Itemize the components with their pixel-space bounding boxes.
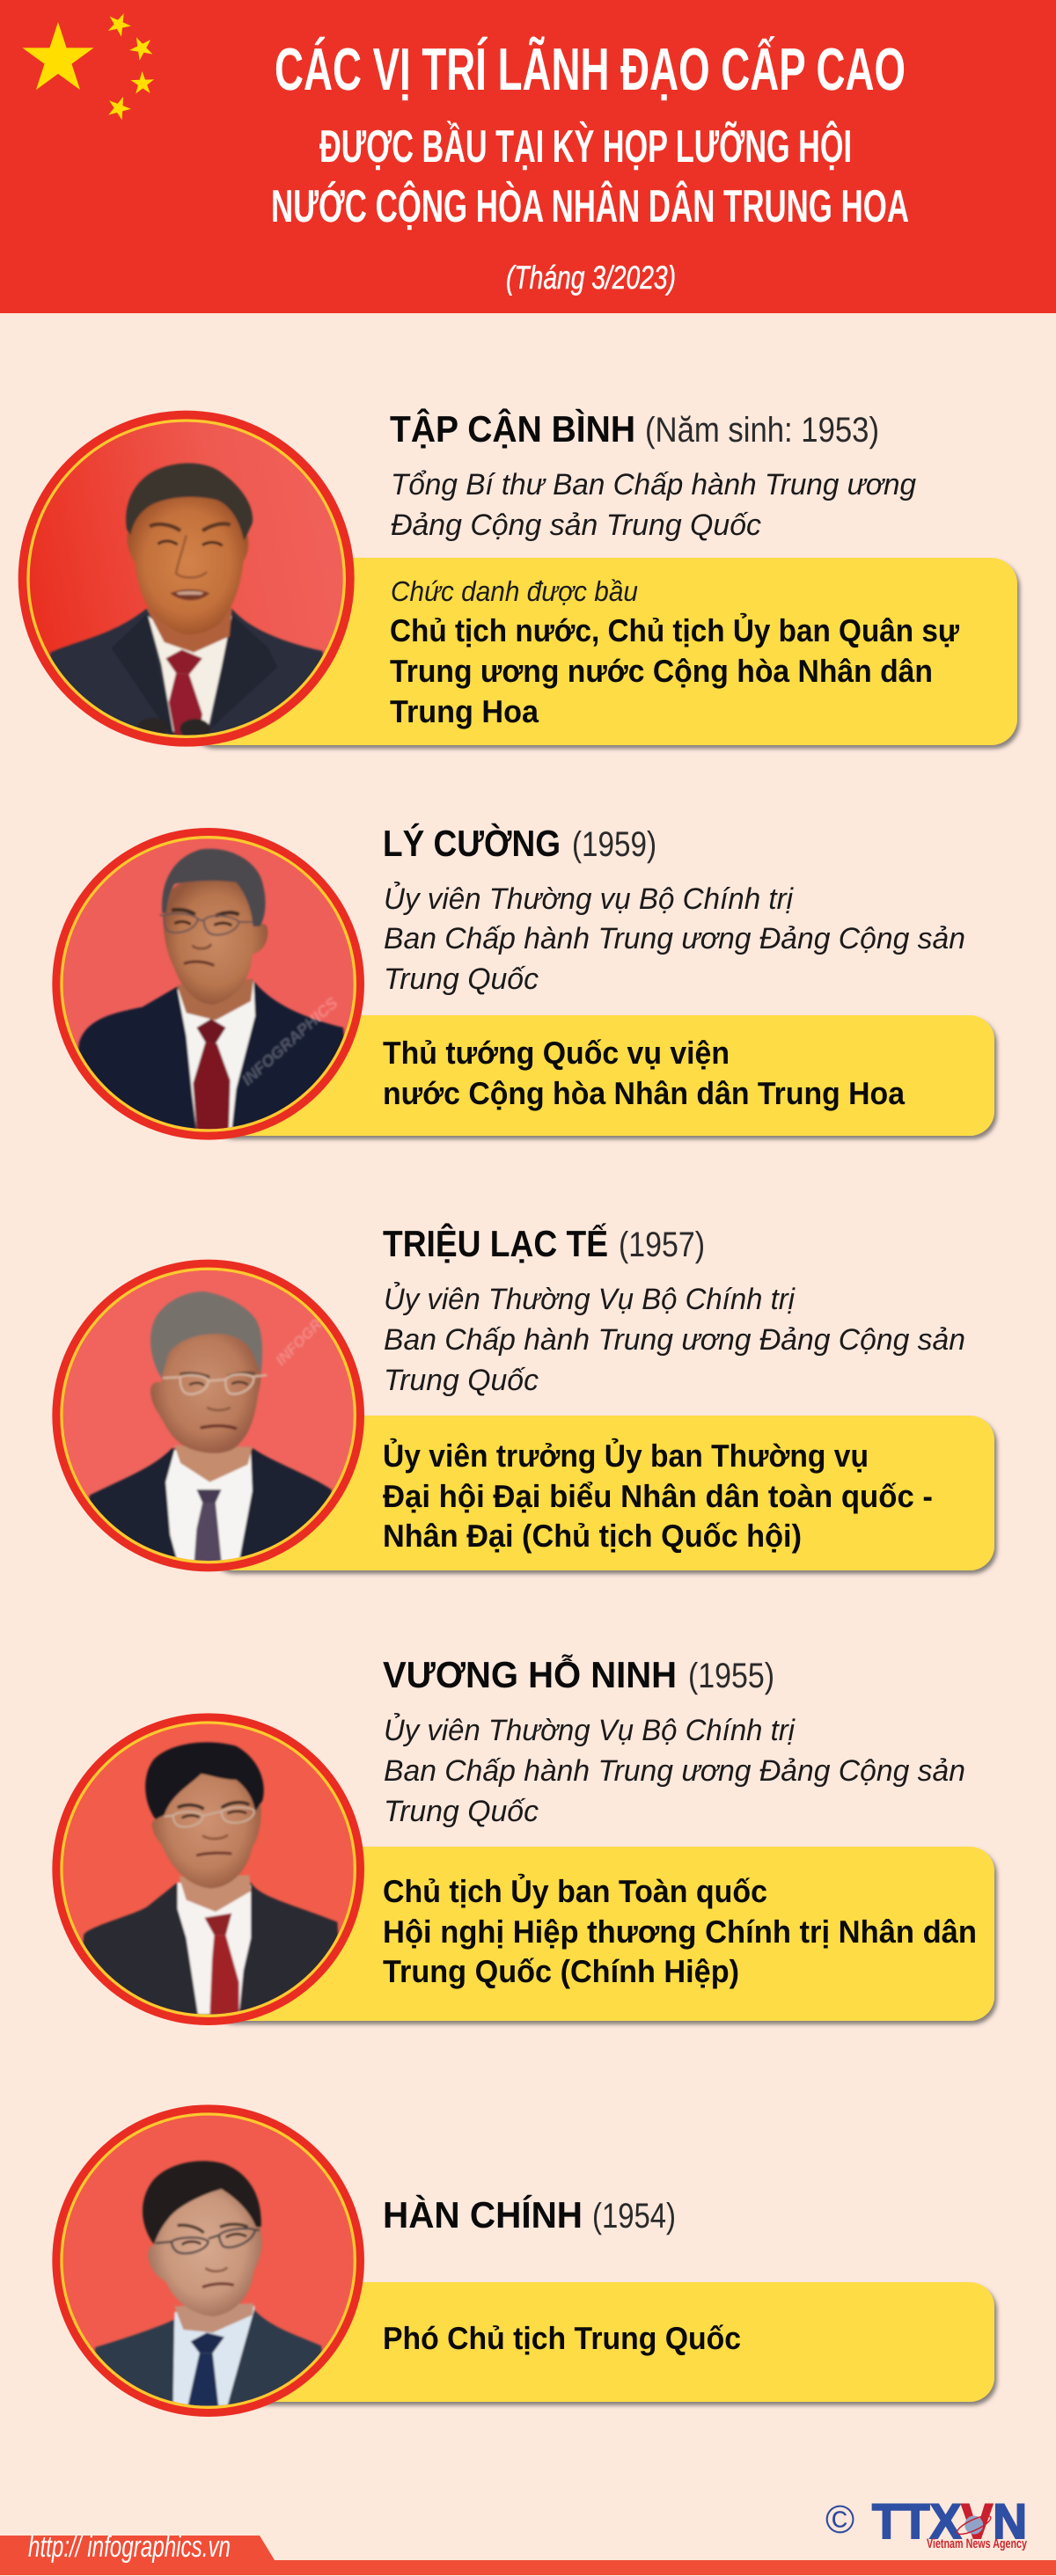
name: (1959) [572, 825, 656, 864]
icon: globe [955, 2513, 993, 2537]
current party role [391, 468, 916, 542]
callout: elected position: Trung ương nước Cộng hòa Nhân dân [390, 653, 933, 689]
party role: Ủy viên Thường Vụ Bộ Chính trị [384, 1282, 796, 1316]
name: (1957) [619, 1226, 705, 1264]
portrait: Lý Cường [52, 828, 364, 1148]
logo: TTXVN: © [825, 2497, 854, 2542]
date: (Tháng 3/2023) [506, 260, 676, 296]
callout: elected position: Chủ tịch Ủy ban Toàn quốc [383, 1873, 767, 1909]
title [271, 36, 909, 232]
logo: TTXVN: TTXVN [872, 2493, 1027, 2549]
callout: elected position: Trung Hoa [390, 693, 539, 729]
callout: elected position [208, 2282, 994, 2402]
icon: flag stars [22, 9, 157, 121]
panel: Vương Hỗ Ninh [52, 1654, 994, 2032]
party role [384, 882, 965, 996]
current party role: Đảng Cộng sản Trung Quốc [391, 509, 761, 542]
name [390, 408, 879, 450]
party role: Trung Quốc [384, 962, 539, 996]
portrait: Triệu Lạc Tế [52, 1260, 365, 1579]
callout: elected position [208, 1416, 994, 1570]
party role: Ủy viên Thường Vụ Bộ Chính trị [384, 1713, 796, 1747]
callout: elected position: Thủ tướng Quốc vụ viện [383, 1035, 730, 1071]
party role [384, 1713, 965, 1828]
portrait: Triệu Lạc Tế: INFOGRAPHICS [272, 1276, 365, 1369]
callout: elected position: Nhân Đại (Chủ tịch Quốc hội) [383, 1518, 802, 1554]
footer bar [0, 2530, 1056, 2575]
panel: Tập Cận Bình [18, 408, 1017, 761]
party role: Trung Quốc [384, 1364, 539, 1397]
name: VƯƠNG HỖ NINH [383, 1654, 677, 1695]
portrait: Vương Hỗ Ninh [52, 1713, 364, 2032]
party role [384, 1282, 965, 1397]
panel: Triệu Lạc Tế [52, 1223, 994, 1579]
party role: Ban Chấp hành Trung ương Đảng Cộng sản [384, 1323, 965, 1357]
name: HÀN CHÍNH [383, 2194, 583, 2236]
callout: elected position: nước Cộng hòa Nhân dân Trung Hoa [383, 1075, 906, 1111]
party role: Trung Quốc [384, 1795, 539, 1828]
callout: elected position [208, 1015, 994, 1136]
name: (1954) [592, 2197, 676, 2236]
callout: elected position: Đại hội Đại biểu Nhân dân toàn quốc - [383, 1478, 933, 1514]
panel: Hàn Chính [52, 2104, 994, 2424]
callout: elected position [187, 558, 1017, 745]
callout: elected position [208, 1847, 994, 2021]
panel: Lý Cường [52, 823, 994, 1148]
current party role: Tổng Bí thư Ban Chấp hành Trung ương [391, 468, 916, 501]
party role: Ban Chấp hành Trung ương Đảng Cộng sản [384, 922, 965, 955]
callout: elected position: Chủ tịch nước, Chủ tịch Ủy ban Quân sự [390, 612, 960, 648]
name: TẬP CẬN BÌNH [390, 408, 635, 450]
portrait: Tập Cận Bình [18, 411, 355, 761]
callout: elected position: Hội nghị Hiệp thương Chính trị Nhân dân [383, 1914, 977, 1950]
website url: http:// infographics.vn [28, 2530, 231, 2564]
name: (1955) [688, 1657, 774, 1695]
header banner [0, 0, 1056, 313]
name: LÝ CƯỜNG [383, 823, 561, 864]
party role: Ủy viên Thường vụ Bộ Chính trị [384, 882, 794, 916]
callout: elected position: Chức danh được bầu [391, 575, 638, 607]
callout: elected position: Trung Quốc (Chính Hiệp) [383, 1953, 739, 1989]
portrait: Lý Cường: INFOGRAPHICS [238, 994, 341, 1089]
callout: elected position: Phó Chủ tịch Trung Quốc [383, 2320, 741, 2356]
portrait: Hàn Chính [52, 2104, 364, 2424]
name: TRIỆU LẠC TẾ [383, 1223, 608, 1264]
party role: Ban Chấp hành Trung ương Đảng Cộng sản [384, 1754, 965, 1788]
callout: elected position: Ủy viên trưởng Ủy ban Thường vụ [383, 1438, 869, 1474]
name: (Năm sinh: 1953) [645, 411, 879, 450]
